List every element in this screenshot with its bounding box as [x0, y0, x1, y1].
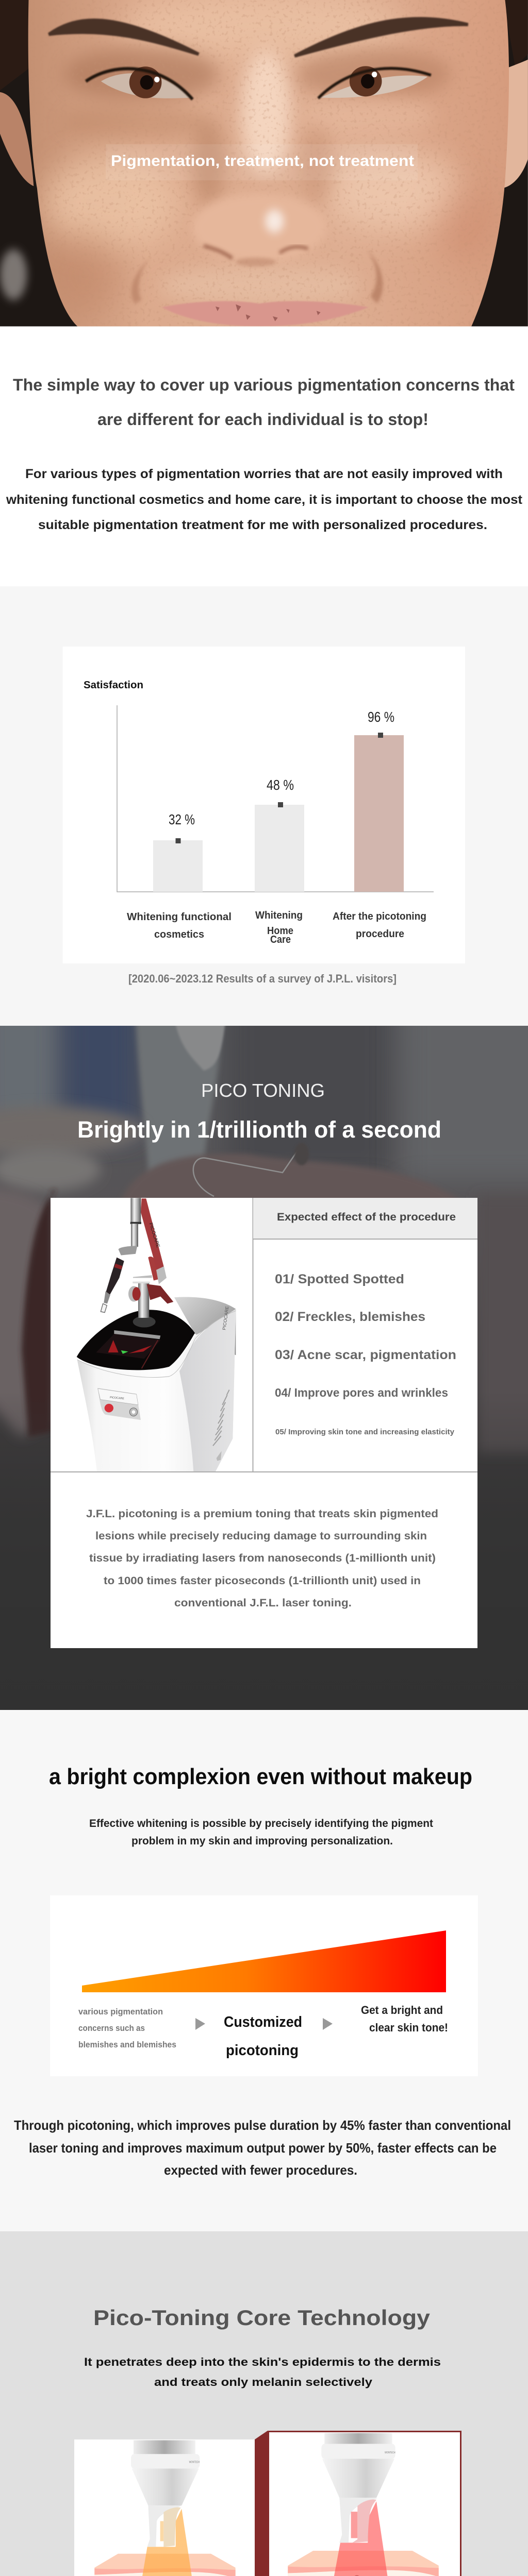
step: customized picotoning: picotoning [226, 2042, 299, 2059]
bar: after picotoning 96 percent: 96 % [368, 709, 394, 725]
closing paragraph: expected with fewer procedures. [164, 2162, 357, 2178]
diagram: conventional laser on skin: WONTECH [189, 2461, 200, 2464]
card: J.P.P.C. toning highlighted [255, 2431, 461, 2576]
step: result: clear skin tone! [369, 2021, 448, 2034]
subheading [89, 1818, 433, 1847]
axis labels: Home [267, 925, 293, 937]
step: starting concerns: blemishes and blemishes [78, 2040, 176, 2049]
description paragraph: to 1000 times faster picoseconds (1-trillionth unit) used in [104, 1575, 421, 1587]
step: customized picotoning: Customized [224, 2014, 302, 2030]
description paragraph: lesions while precisely reducing damage to surrounding skin [95, 1530, 427, 1542]
list header: Expected effect of the procedure [277, 1211, 456, 1223]
step: result: Get a bright and [361, 2004, 443, 2016]
arrow [195, 2018, 205, 2030]
bar: whitening home care 48 percent: 48 % [267, 777, 294, 793]
text block: introduction [6, 376, 523, 532]
heading: Pico-Toning Core Technology [93, 2306, 431, 2330]
axis labels: Whitening [255, 910, 303, 921]
description paragraph: conventional J.F.L. laser toning. [174, 1597, 352, 1609]
step: starting concerns [78, 2007, 176, 2049]
icon: picocare laser machine: PICOCARE [222, 1306, 230, 1330]
step: customized picotoning [224, 2014, 302, 2059]
paragraph: For various types of pigmentation worries that are not easily improved with [25, 467, 503, 481]
axis labels: Whitening functional [127, 911, 232, 923]
subheading: Effective whitening is possible by precisely identifying the pigment [89, 1818, 433, 1829]
step: starting concerns: concerns such as [78, 2023, 145, 2033]
paragraph: whitening functional cosmetics and home care, it is important to choose the most [6, 493, 523, 507]
survey caption: [2020.06~2023.12 Results of a survey of J.P.L. visitors] [128, 972, 397, 985]
photo: close-up freckled face [0, 0, 528, 326]
card dividers [51, 1198, 477, 1472]
panel: hero photo with face [0, 0, 528, 326]
hero caption: Pigmentation, treatment, not treatment [111, 152, 414, 170]
effect items: 05/ Improving skin tone and increasing elasticity [275, 1428, 455, 1436]
heading: a bright complexion even without makeup [49, 1764, 472, 1789]
card: existing laser toning [74, 2439, 255, 2576]
subheading: problem in my skin and improving personalization. [131, 1835, 393, 1847]
effect items [275, 1272, 456, 1436]
closing paragraph [14, 2117, 511, 2178]
axis labels: Care [270, 934, 291, 945]
arrow [323, 2018, 333, 2030]
heading: are different for each individual is to stop! [97, 410, 428, 429]
bar: after picotoning 96 percent [354, 709, 404, 892]
closing paragraph: laser toning and improves maximum output power by 50%, faster effects can be [29, 2140, 497, 2156]
panel: pico toning dark section [0, 994, 528, 1710]
panel: satisfaction section [0, 586, 528, 1026]
panel: bright complexion section [0, 1710, 528, 2231]
effect items: 03/ Acne scar, pigmentation [275, 1348, 456, 1362]
axis labels [127, 910, 426, 945]
chart axes [117, 705, 434, 892]
bar: whitening functional cosmetics 32 percent: 32 % [169, 811, 195, 827]
lips [161, 301, 369, 326]
subheading: and treats only melanin selectively [154, 2376, 373, 2388]
icon: picocare laser machine [77, 1198, 236, 1471]
effect items: 02/ Freckles, blemishes [275, 1310, 425, 1324]
axis labels: cosmetics [154, 929, 204, 940]
axis labels: procedure [356, 928, 404, 940]
hero caption band [106, 144, 418, 180]
brows [49, 20, 199, 54]
bar: whitening home care 48 percent [255, 777, 304, 892]
effect items: 01/ Spotted Spotted [275, 1272, 404, 1286]
subheading [84, 2355, 441, 2388]
icon: picocare laser machine: PICOCARE [148, 1222, 161, 1248]
diagram: pico laser on skin [288, 2433, 439, 2576]
diagram: pico laser on skin: WONTECH [385, 2451, 395, 2454]
paragraph [6, 467, 523, 532]
background photo: blurred treatment scene [0, 994, 528, 1710]
icon: picocare laser machine: PICOCARE [110, 1396, 124, 1400]
description paragraph: J.F.L. picotoning is a premium toning that treats skin pigmented [86, 1508, 438, 1520]
axis labels: After the picotoning [333, 911, 426, 922]
chart title: Satisfaction [84, 680, 143, 691]
description paragraph: tissue by irradiating lasers from nanoseconds (1-millionth unit) [89, 1552, 436, 1564]
eyebrow label: PICO TONING [201, 1080, 325, 1101]
paragraph: suitable pigmentation treatment for me with personalized procedures. [38, 518, 487, 532]
bar chart card [63, 647, 465, 963]
gradient wedge chart [82, 1930, 446, 1992]
description paragraph [86, 1508, 438, 1609]
eyes [101, 73, 192, 98]
diagram: conventional laser on skin [94, 2440, 236, 2576]
expected effects list [253, 1198, 477, 1436]
heading: The simple way to cover up various pigmentation concerns that [13, 376, 515, 394]
nose [192, 193, 326, 262]
heading [13, 376, 515, 429]
section heading: Brightly in 1/trillionth of a second [77, 1116, 441, 1143]
subheading: It penetrates deep into the skin's epidermis to the dermis [84, 2355, 441, 2368]
panel: core technology section [0, 2231, 528, 2576]
effect items: 04/ Improve pores and wrinkles [275, 1386, 448, 1399]
white info card [51, 1198, 477, 1648]
process card [50, 1895, 478, 2076]
bar: whitening functional cosmetics 32 percent [153, 811, 203, 892]
step: starting concerns: various pigmentation [78, 2007, 163, 2016]
step: result [361, 2004, 448, 2034]
